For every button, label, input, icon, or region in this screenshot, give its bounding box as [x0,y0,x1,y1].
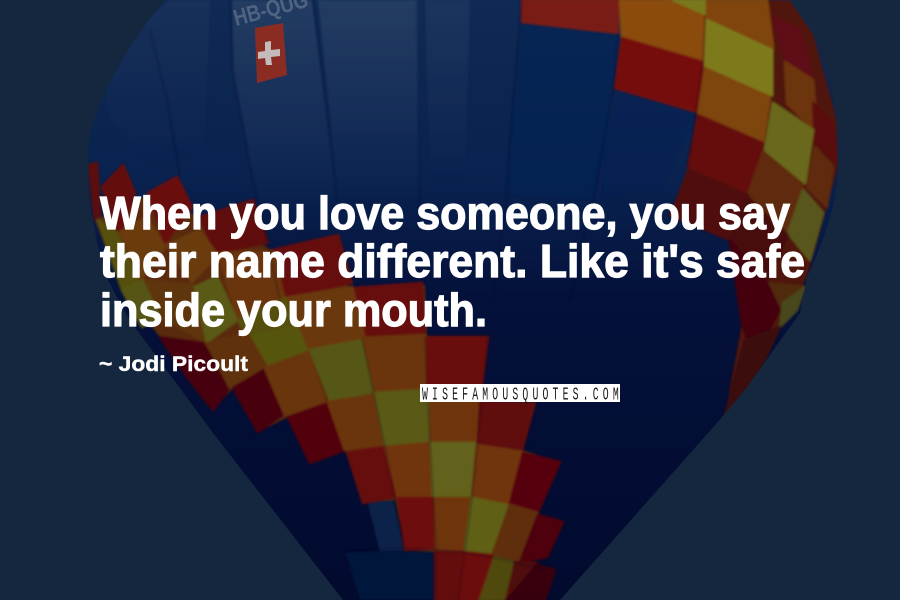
panel backing: centre [95,195,563,600]
quote text: inside your mouth. [100,284,487,336]
quote text: their name different. Like it's safe [100,235,805,287]
gore seams [264,0,706,600]
quote text: When you love someone, you say [100,187,790,239]
quote text [100,187,805,336]
watermark badge: WISEFAMOUSQUOTES.COM [422,383,619,406]
panel backing: right side [676,0,838,400]
envelope gore highlights [232,0,470,600]
icon: swiss flag [255,23,287,83]
author attribution: ~ Jodi Picoult [99,353,248,376]
top right panels [522,0,837,415]
middle left panels [89,163,425,410]
lower panels [233,335,563,600]
